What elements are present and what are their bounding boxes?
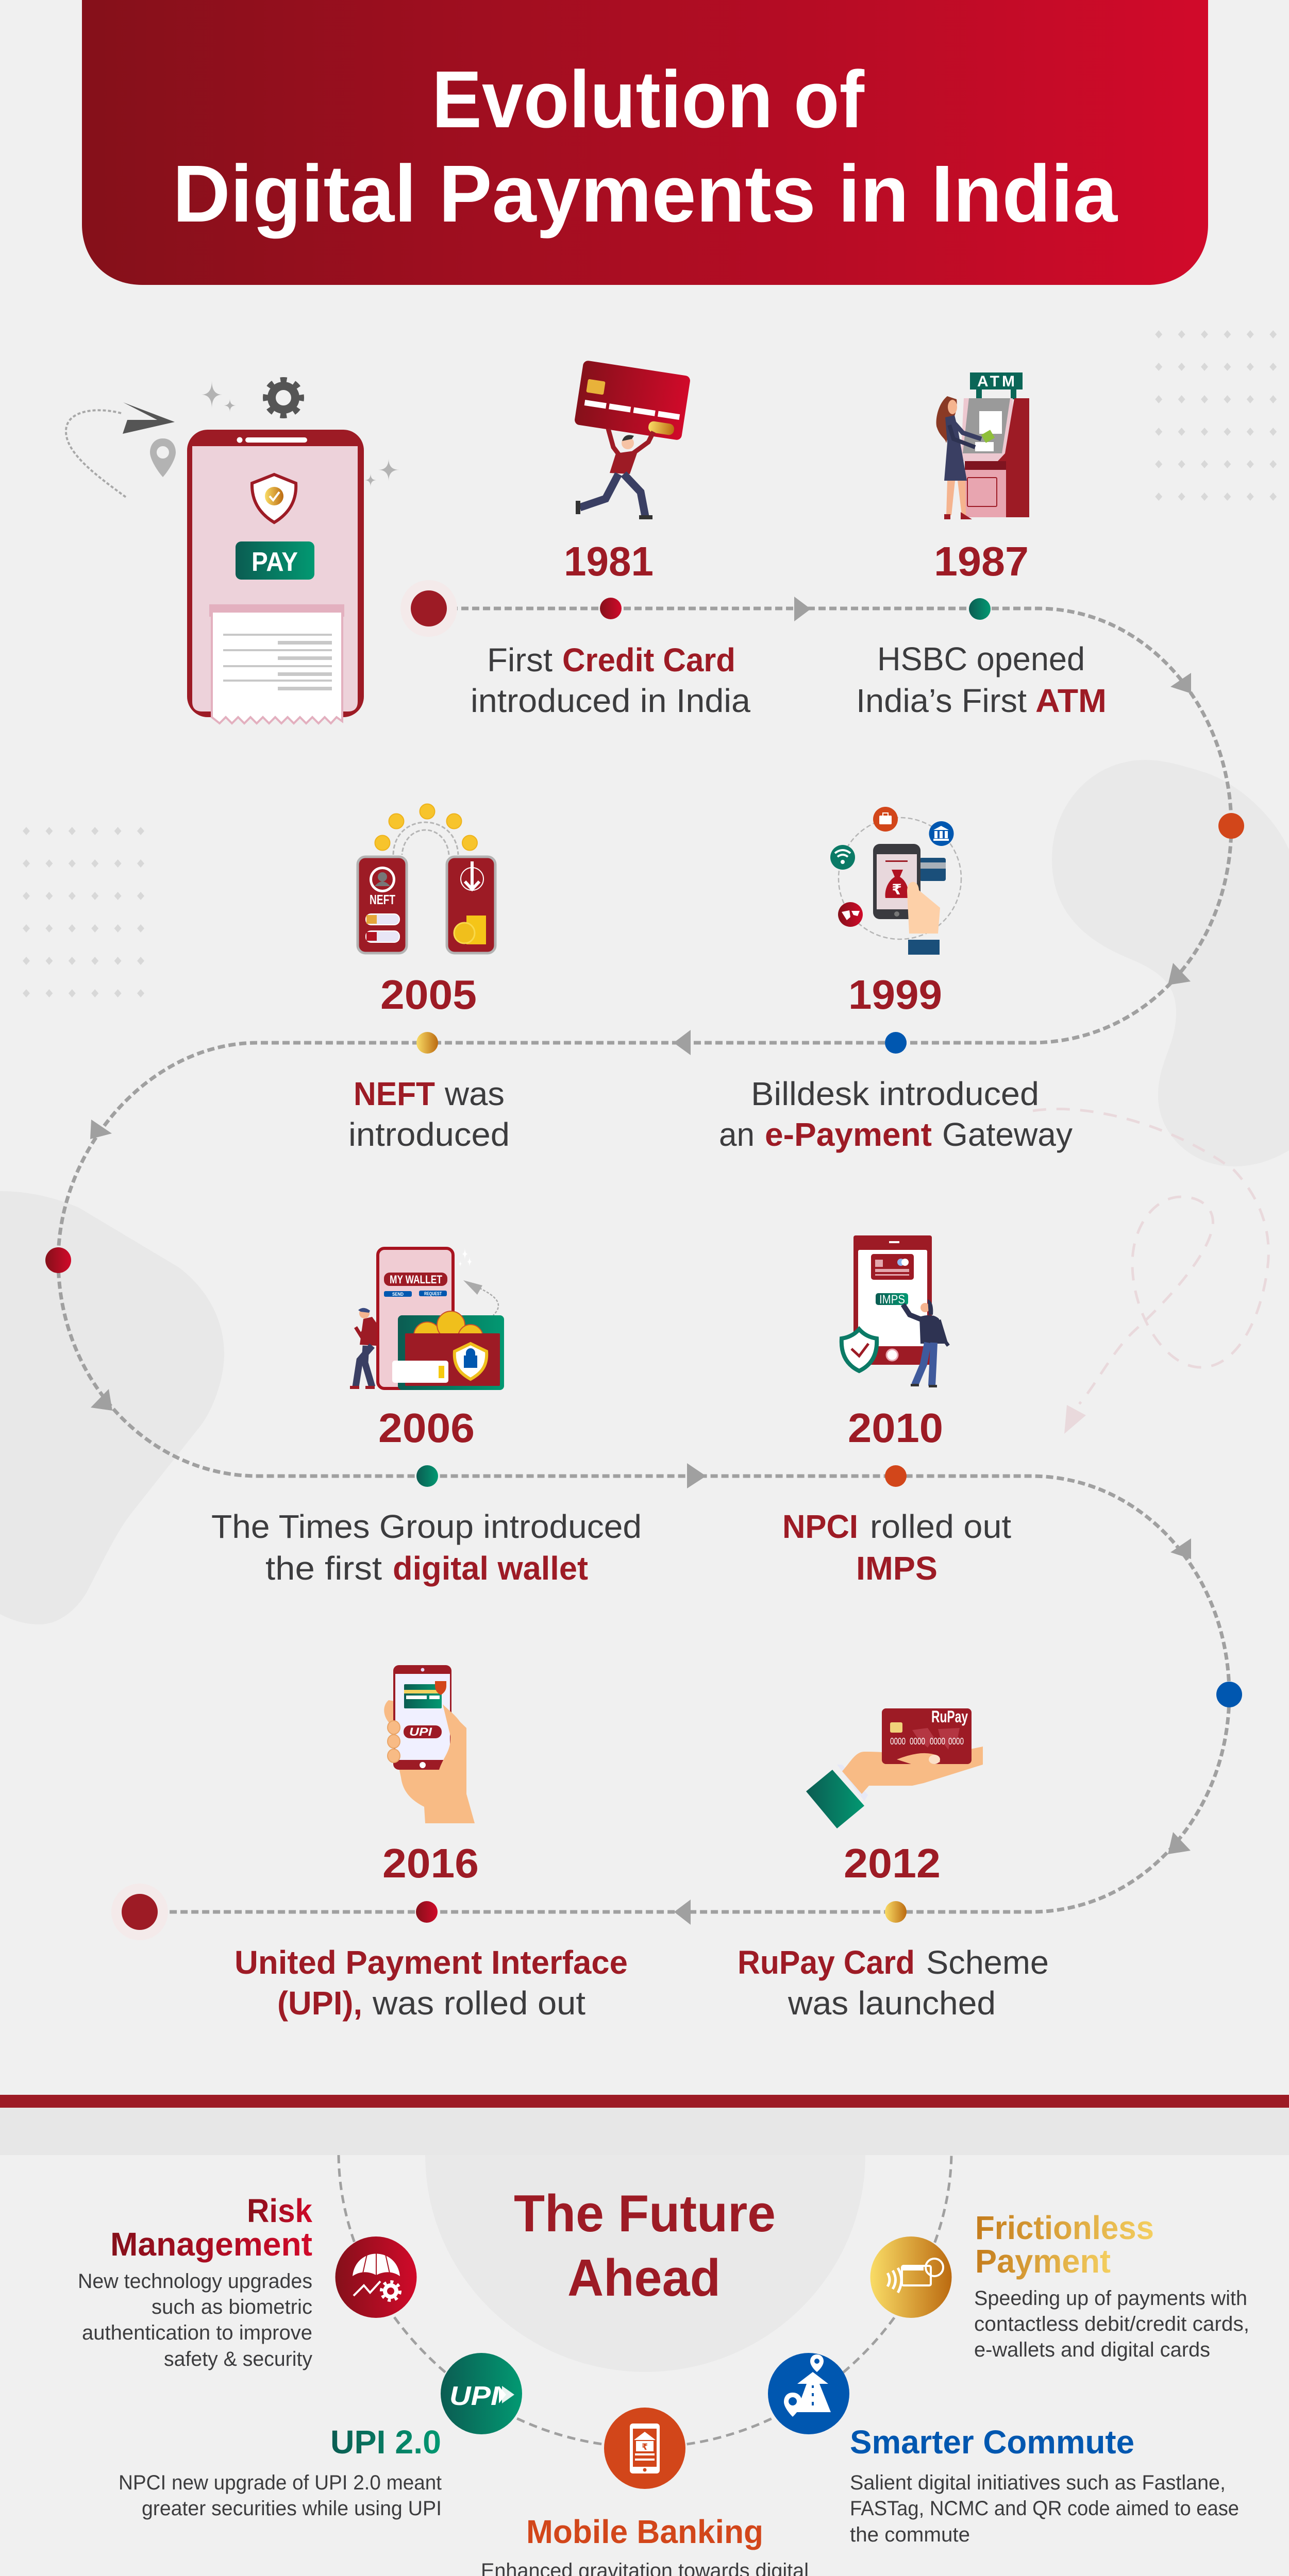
dot red left bbox=[45, 1247, 71, 1273]
dot blue right bbox=[1216, 1682, 1242, 1707]
heading: The Future bbox=[514, 2185, 776, 2243]
description: introduced bbox=[348, 1116, 510, 1153]
description: authentication to improve bbox=[82, 2321, 312, 2344]
description: rolled out bbox=[870, 1508, 1011, 1545]
description: Scheme bbox=[926, 1944, 1049, 1981]
arrow 1 bbox=[794, 597, 811, 621]
description bbox=[856, 640, 1107, 719]
description: Billdesk introduced bbox=[751, 1075, 1039, 1112]
description bbox=[119, 2471, 442, 2520]
dot 2005 bbox=[416, 1032, 438, 1054]
year: 2005 bbox=[380, 972, 477, 1018]
milestone 2012 bbox=[738, 1707, 1049, 2022]
year: 2012 bbox=[844, 1840, 941, 1886]
arrow 5 bbox=[90, 1120, 112, 1139]
receipt slot bbox=[209, 604, 344, 617]
description bbox=[78, 2270, 312, 2370]
description: such as biometric bbox=[152, 2296, 312, 2318]
description bbox=[719, 1075, 1073, 1153]
dot 2012 bbox=[885, 1901, 907, 1923]
dashed arc bbox=[339, 2155, 951, 2447]
semicircle backdrop bbox=[425, 2155, 865, 2372]
description: First bbox=[487, 641, 553, 679]
paper plane trail bbox=[66, 410, 127, 498]
illustration: digital wallet: SEND bbox=[392, 1292, 404, 1297]
icon: contactless card bbox=[870, 2236, 951, 2318]
dot 2006 bbox=[416, 1465, 438, 1487]
description: e-Payment bbox=[765, 1116, 932, 1153]
icon: UPI bbox=[441, 2353, 522, 2434]
milestone 2016 bbox=[235, 1665, 628, 2022]
dot pattern left bbox=[15, 815, 152, 1010]
description: NEFT bbox=[354, 1075, 435, 1112]
title line 2: Digital Payments in India bbox=[173, 149, 1118, 239]
icon: road with pins bbox=[768, 2353, 849, 2434]
description: FASTag, NCMC and QR code aimed to ease bbox=[850, 2497, 1239, 2520]
background blob right bbox=[1052, 760, 1289, 1166]
arrow 9 bbox=[1168, 1832, 1191, 1854]
milestone 2010 bbox=[782, 1235, 1011, 1587]
hero illustration: phone with PAY: PAY bbox=[252, 547, 298, 577]
milestone 1987 bbox=[856, 372, 1107, 719]
item: mobile banking bbox=[481, 2408, 809, 2576]
illustration: hand holding phone with UPI bbox=[384, 1665, 475, 1823]
year: 1999 bbox=[848, 972, 942, 1018]
hero illustration: phone with PAY bbox=[66, 380, 399, 723]
description: greater securities while using UPI bbox=[142, 2497, 442, 2520]
description bbox=[850, 2471, 1239, 2546]
title banner bbox=[82, 0, 1208, 285]
divider band bbox=[0, 2095, 1289, 2108]
milestone 2006 bbox=[211, 1247, 642, 1587]
illustration: digital wallet: MY WALLET bbox=[390, 1273, 442, 1286]
milestone 2005 bbox=[348, 804, 510, 1153]
title: Management bbox=[110, 2226, 312, 2263]
title: Payment bbox=[975, 2243, 1111, 2280]
grey strip bbox=[0, 2108, 1289, 2155]
icon: UPI: UPI bbox=[449, 2381, 500, 2411]
location pin bbox=[150, 438, 176, 477]
description: HSBC opened bbox=[877, 640, 1085, 677]
description: Credit Card bbox=[562, 641, 735, 679]
illustration: IMPS phone bbox=[842, 1235, 948, 1387]
illustration: hand holding phone with UPI: UPI bbox=[409, 1725, 432, 1738]
description: New technology upgrades bbox=[78, 2270, 312, 2293]
description: the first bbox=[265, 1550, 382, 1587]
year: 2016 bbox=[382, 1840, 479, 1886]
illustration: mobile payment hub bbox=[830, 807, 961, 955]
arrow 4 bbox=[674, 1030, 691, 1055]
description: was launched bbox=[788, 1985, 996, 2022]
heading bbox=[514, 2185, 776, 2307]
year: 2010 bbox=[848, 1405, 943, 1451]
milestone 1999 bbox=[719, 807, 1073, 1153]
description: Gateway bbox=[942, 1116, 1073, 1153]
arrow 6 bbox=[91, 1389, 112, 1411]
description bbox=[974, 2287, 1249, 2361]
illustration: hand holding RuPay card: 0000 bbox=[890, 1736, 906, 1747]
description: ATM bbox=[1035, 682, 1107, 719]
illustration: hand holding RuPay card: 0000 bbox=[930, 1736, 945, 1747]
paper plane bbox=[123, 402, 175, 434]
title: Risk bbox=[247, 2192, 312, 2229]
illustration: NEFT phones and coins bbox=[358, 804, 495, 953]
description: NPCI new upgrade of UPI 2.0 meant bbox=[119, 2471, 442, 2494]
receipt bbox=[212, 612, 342, 723]
gear bbox=[266, 380, 301, 415]
description: Speeding up of payments with bbox=[974, 2287, 1247, 2310]
end marker bbox=[111, 1884, 168, 1940]
item: risk management bbox=[78, 2192, 416, 2370]
dashed timeline path bbox=[58, 608, 1231, 1912]
icon: phone with bank: ₹ bbox=[642, 2442, 648, 2452]
dot pattern top right bbox=[1147, 318, 1284, 513]
illustration: person lifting credit card bbox=[574, 360, 691, 519]
illustration: mobile payment hub: ₹ bbox=[892, 882, 902, 897]
year: 2006 bbox=[378, 1405, 475, 1451]
illustration: hand holding RuPay card: 0000 bbox=[910, 1736, 925, 1747]
description: introduced in India bbox=[471, 682, 750, 719]
illustration: hand holding RuPay card bbox=[806, 1707, 983, 1828]
arrow 2 bbox=[1170, 673, 1191, 693]
illustration: hand holding RuPay card: 0000 bbox=[948, 1736, 964, 1747]
start marker bbox=[400, 580, 457, 637]
illustration: woman at ATM bbox=[936, 372, 1029, 519]
arrow 7 bbox=[687, 1463, 706, 1488]
description bbox=[471, 641, 750, 719]
dot 1981 bbox=[600, 598, 622, 619]
title: Frictionless bbox=[975, 2209, 1154, 2246]
dot 2016 bbox=[416, 1901, 438, 1923]
PAY button bbox=[236, 541, 314, 580]
description: IMPS bbox=[856, 1550, 938, 1587]
item: UPI 2.0 bbox=[119, 2353, 522, 2520]
description: India’s First bbox=[856, 682, 1027, 719]
section: the future ahead bbox=[0, 2095, 1289, 2576]
sparkles bbox=[202, 381, 399, 487]
description: Salient digital initiatives such as Fastlane, bbox=[850, 2471, 1226, 2494]
heading: Ahead bbox=[567, 2249, 721, 2307]
description: was rolled out bbox=[372, 1985, 585, 2022]
dot orange right bbox=[1218, 813, 1244, 839]
item: frictionless payment bbox=[870, 2209, 1249, 2361]
description: RuPay Card bbox=[738, 1944, 915, 1981]
icon: umbrella and gear bbox=[335, 2236, 416, 2318]
title line 1: Evolution of bbox=[432, 55, 865, 145]
icon: phone with bank bbox=[604, 2408, 685, 2489]
illustration: digital wallet bbox=[350, 1247, 504, 1390]
description bbox=[211, 1508, 642, 1587]
title: Mobile Banking bbox=[526, 2513, 763, 2550]
description bbox=[782, 1508, 1011, 1587]
description: an bbox=[719, 1116, 755, 1153]
illustration: IMPS phone: IMPS bbox=[879, 1293, 905, 1307]
arrow 3 bbox=[1168, 963, 1191, 985]
description: (UPI), bbox=[277, 1985, 362, 2022]
shield bbox=[252, 474, 296, 522]
title bbox=[975, 2209, 1154, 2280]
dot 1987 bbox=[969, 598, 991, 620]
background blob left bbox=[0, 1191, 224, 1624]
description: e-wallets and digital cards bbox=[974, 2338, 1210, 2361]
phone body bbox=[187, 430, 364, 717]
description: was bbox=[444, 1075, 505, 1112]
milestone 1981 bbox=[471, 360, 750, 719]
pale dashed plane trail bbox=[1033, 1109, 1268, 1434]
description: The Times Group introduced bbox=[211, 1508, 642, 1545]
illustration: digital wallet: REQUEST bbox=[424, 1291, 442, 1296]
title bbox=[110, 2192, 312, 2263]
year: 1981 bbox=[564, 538, 654, 584]
title: UPI 2.0 bbox=[330, 2424, 441, 2461]
arrow 10 bbox=[674, 1900, 691, 1925]
description bbox=[235, 1944, 628, 2022]
description: contactless debit/credit cards, bbox=[974, 2313, 1249, 2335]
description: digital wallet bbox=[393, 1550, 588, 1587]
description: United Payment Interface bbox=[235, 1944, 628, 1981]
description: NPCI bbox=[782, 1508, 858, 1545]
description: safety & security bbox=[164, 2348, 312, 2370]
description bbox=[738, 1944, 1049, 2022]
year: 1987 bbox=[934, 538, 1029, 584]
description bbox=[348, 1075, 510, 1153]
dot 1999 bbox=[885, 1032, 907, 1054]
arrow 8 bbox=[1170, 1538, 1191, 1559]
title: Smarter Commute bbox=[850, 2424, 1134, 2461]
item: smarter commute bbox=[768, 2353, 1239, 2546]
illustration: woman at ATM: ATM bbox=[977, 373, 1015, 390]
dot 2010 bbox=[885, 1465, 907, 1487]
phone screen bbox=[192, 446, 358, 711]
illustration: NEFT phones and coins: NEFT bbox=[370, 892, 395, 907]
illustration: hand holding RuPay card: RuPay bbox=[931, 1707, 968, 1726]
description: the commute bbox=[850, 2523, 970, 2546]
